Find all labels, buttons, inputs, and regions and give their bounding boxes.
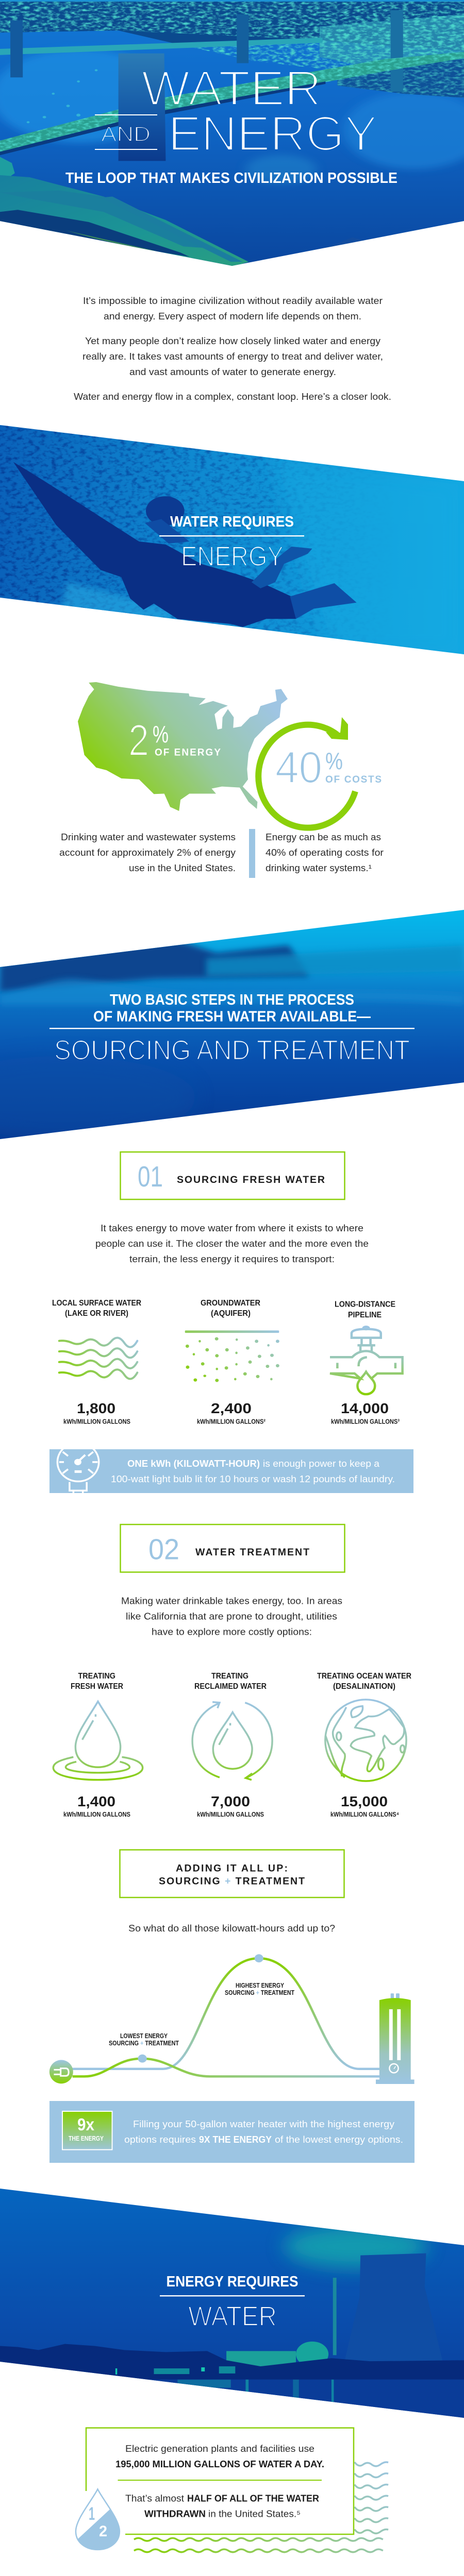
column: long-distance pipeline: PIPELINE	[348, 1311, 382, 1319]
column: treating reclaimed water: 7,000	[211, 1793, 250, 1809]
curve: highest energy	[73, 1958, 380, 2069]
box: adding it all up: ADDING IT ALL UP:	[176, 1863, 288, 1874]
column: treating reclaimed water: kWh/MILLION GALLONS	[197, 1811, 264, 1818]
intro text: Yet many people don’t realize how closely linked water and energy	[85, 336, 380, 346]
treatment text: like California that are prone to drought, utilities	[126, 1612, 337, 1622]
icon: globe	[325, 1700, 406, 1781]
circular arrow	[258, 717, 355, 828]
column: treating ocean water: 15,000	[341, 1793, 388, 1809]
panel: water withdrawn: Electric generation plants and facilities use	[125, 2444, 314, 2454]
column: groundwater: (AQUIFER)	[211, 1309, 251, 1318]
step 02 box: 02	[148, 1533, 179, 1566]
badge: 9x	[62, 2111, 112, 2149]
heading	[159, 514, 304, 572]
column: treating fresh water: 1,400	[77, 1793, 115, 1809]
column: long-distance pipeline: kWh/MILLION GALLONS³	[331, 1418, 400, 1425]
heading: ENERGY REQUIRES	[166, 2274, 298, 2290]
step 02 box	[121, 1524, 344, 1572]
column: treating ocean water: TREATING OCEAN WATER	[317, 1672, 411, 1681]
column: treating reclaimed water: RECLAIMED WATER	[194, 1682, 267, 1691]
chart: energy curves from plug to water heater: SOURCING + TREATMENT	[109, 2040, 179, 2047]
treatment text	[121, 1596, 342, 1637]
intro text: and vast amounts of water to generate energy.	[129, 367, 336, 377]
icon: plug	[49, 2060, 73, 2083]
panel: water withdrawn: in the United States.⁵	[208, 2509, 301, 2519]
callout: one kWh: 100-watt light bulb lit for 10 hours or wash 12 pounds of laundry.	[111, 1474, 395, 1484]
icon: drop in recycle arrows	[192, 1702, 272, 1780]
column: treating ocean water	[317, 1672, 411, 1818]
US map	[78, 682, 288, 811]
treatment text: Making water drinkable takes energy, too. In areas	[121, 1596, 342, 1606]
loop stat: 40% of costs	[258, 717, 382, 828]
heading: OF MAKING FRESH WATER AVAILABLE—	[93, 1009, 371, 1025]
column: groundwater: kWh/MILLION GALLONS²	[197, 1418, 266, 1425]
icon: half-full drop	[75, 2487, 121, 2550]
column: local surface water: 1,800	[77, 1400, 115, 1416]
column: treating ocean water: (DESALINATION)	[333, 1682, 395, 1691]
icon: waves	[59, 1338, 137, 1379]
column: local surface water: LOCAL SURFACE WATER	[52, 1299, 141, 1308]
panel: water withdrawn: WITHDRAWN	[144, 2509, 206, 2519]
sourcing text	[95, 1223, 369, 1264]
stat descriptions	[59, 829, 384, 878]
stat descriptions: account for approximately 2% of energy	[59, 848, 236, 858]
column: treating fresh water	[53, 1672, 143, 1818]
icon: water heater	[376, 1993, 415, 2084]
stat descriptions: drinking water systems.¹	[266, 863, 372, 873]
panel: water withdrawn: That’s almost	[125, 2494, 184, 2504]
column: local surface water	[52, 1299, 141, 1425]
section banner: sourcing and treatment	[0, 907, 464, 1141]
callout: one kWh	[49, 1449, 413, 1493]
heading	[160, 2274, 305, 2332]
column: long-distance pipeline: LONG-DISTANCE	[335, 1300, 395, 1309]
loop stat: 40% of costs: OF COSTS	[325, 774, 382, 785]
stat descriptions: use in the United States.	[129, 863, 236, 873]
panel: water withdrawn	[74, 2428, 354, 2554]
hero banner	[0, 0, 464, 267]
callout: 9x the energy: 9X THE ENERGY	[199, 2134, 272, 2145]
question text: So what do all those kilowatt-hours add up to?	[128, 1923, 335, 1934]
callout: 9x the energy	[49, 2101, 415, 2163]
intro text: Water and energy flow in a complex, constant loop. Here’s a closer look.	[74, 392, 391, 402]
stat descriptions: Drinking water and wastewater systems	[61, 832, 236, 842]
map stat: 2% of energy: %	[153, 721, 169, 748]
treatment text: have to explore more costly options:	[152, 1627, 312, 1637]
loop stat: 40% of costs: 40	[275, 743, 322, 792]
column: treating fresh water: kWh/MILLION GALLONS	[63, 1811, 130, 1818]
stat descriptions: 40% of operating costs for	[266, 848, 384, 858]
surfer photo	[0, 422, 464, 659]
callout: 9x the energy: of the lowest energy options.	[275, 2134, 403, 2145]
icon: pipe with valve and drop	[330, 1327, 403, 1394]
chart: energy curves from plug to water heater: SOURCING + TREATMENT	[225, 1989, 294, 1996]
chart: energy curves from plug to water heater: HIGHEST ENERGY	[236, 1982, 285, 1989]
intro text: It’s impossible to imagine civilization without readily available water	[83, 296, 383, 306]
step 02 box: WATER TREATMENT	[195, 1547, 309, 1558]
title: ENERGY	[168, 106, 377, 161]
curve: lowest energy	[73, 2059, 380, 2076]
intro text	[74, 296, 391, 402]
badge: 9x: THE ENERGY	[69, 2134, 104, 2142]
lake photo	[0, 907, 464, 1141]
sourcing text: It takes energy to move water from where it exists to where	[101, 1223, 363, 1233]
step 01 box: 01	[138, 1160, 163, 1193]
section banner: energy requires water	[0, 2184, 464, 2421]
callout: one kWh: is enough power to keep a	[263, 1459, 380, 1469]
icon: half-full drop: 1	[89, 2504, 95, 2524]
column: long-distance pipeline	[330, 1300, 403, 1425]
chart: energy curves from plug to water heater: LOWEST ENERGY	[120, 2032, 168, 2040]
panel: water withdrawn: 195,000 MILLION GALLONS OF WATER A DAY.	[115, 2459, 324, 2469]
sourcing text: terrain, the less energy it requires to transport:	[129, 1254, 335, 1264]
chart: energy curves from plug to water heater	[49, 1954, 415, 2084]
icon: drop with ripples	[53, 1701, 143, 1780]
icon: half-full drop: 2	[99, 2523, 107, 2540]
heading: TWO BASIC STEPS IN THE PROCESS	[110, 992, 354, 1008]
column: local surface water: (LAKE OR RIVER)	[65, 1309, 128, 1318]
callout: 9x the energy: options requires	[124, 2134, 196, 2145]
subtitle: THE LOOP THAT MAKES CIVILIZATION POSSIBLE	[65, 170, 397, 187]
box: adding it all up: SOURCING + TREATMENT	[159, 1875, 305, 1887]
column: treating fresh water: TREATING	[78, 1672, 115, 1681]
column: local surface water: kWh/MILLION GALLONS	[63, 1418, 130, 1425]
box: adding it all up	[120, 1850, 344, 1897]
hero photo: city, bridges and river	[0, 0, 464, 267]
column: long-distance pipeline: 14,000	[341, 1400, 389, 1416]
heading	[49, 992, 415, 1065]
column: treating fresh water: FRESH WATER	[71, 1682, 123, 1691]
sourcing text: people can use it. The closer the water and the more even the	[95, 1239, 369, 1249]
column: treating reclaimed water	[192, 1672, 272, 1818]
map stat: 2% of energy: OF ENERGY	[155, 747, 221, 758]
icon: aquifer dots	[185, 1330, 279, 1382]
heading: WATER	[188, 2301, 277, 2332]
intro text: and energy. Every aspect of modern life depends on them.	[104, 311, 361, 321]
panel: water withdrawn: HALF OF ALL OF THE WATER	[187, 2494, 319, 2504]
title: AND	[101, 122, 151, 146]
step 01 box: SOURCING FRESH WATER	[177, 1174, 325, 1185]
heading: SOURCING AND TREATMENT	[54, 1035, 410, 1065]
stat descriptions: Energy can be as much as	[266, 832, 381, 842]
column: groundwater: GROUNDWATER	[201, 1299, 260, 1308]
column: treating reclaimed water: TREATING	[211, 1672, 248, 1681]
power plant photo	[0, 2184, 464, 2421]
section banner: water requires energy	[0, 422, 464, 659]
icon: gauge	[57, 1449, 100, 1493]
step 01 box	[121, 1152, 344, 1199]
badge: 9x: 9x	[77, 2115, 95, 2134]
title: WATER	[141, 61, 322, 116]
background waves	[134, 2462, 388, 2552]
column: groundwater	[185, 1299, 279, 1425]
loop stat: 40% of costs: %	[325, 748, 343, 774]
heading: ENERGY	[181, 541, 284, 572]
callout: 9x the energy: Filling your 50-gallon water heater with the highest energy	[133, 2119, 394, 2129]
map stat: 2% of energy: 2	[128, 716, 149, 765]
title	[95, 61, 377, 161]
callout: one kWh: ONE kWh (KILOWATT-HOUR)	[127, 1459, 260, 1469]
column: groundwater: 2,400	[211, 1400, 252, 1416]
map stat: 2% of energy	[78, 682, 288, 811]
intro text: really are. It takes vast amounts of energy to treat and deliver water,	[82, 351, 383, 362]
column: treating ocean water: kWh/MILLION GALLONS⁴	[330, 1811, 399, 1818]
heading: WATER REQUIRES	[170, 514, 294, 530]
